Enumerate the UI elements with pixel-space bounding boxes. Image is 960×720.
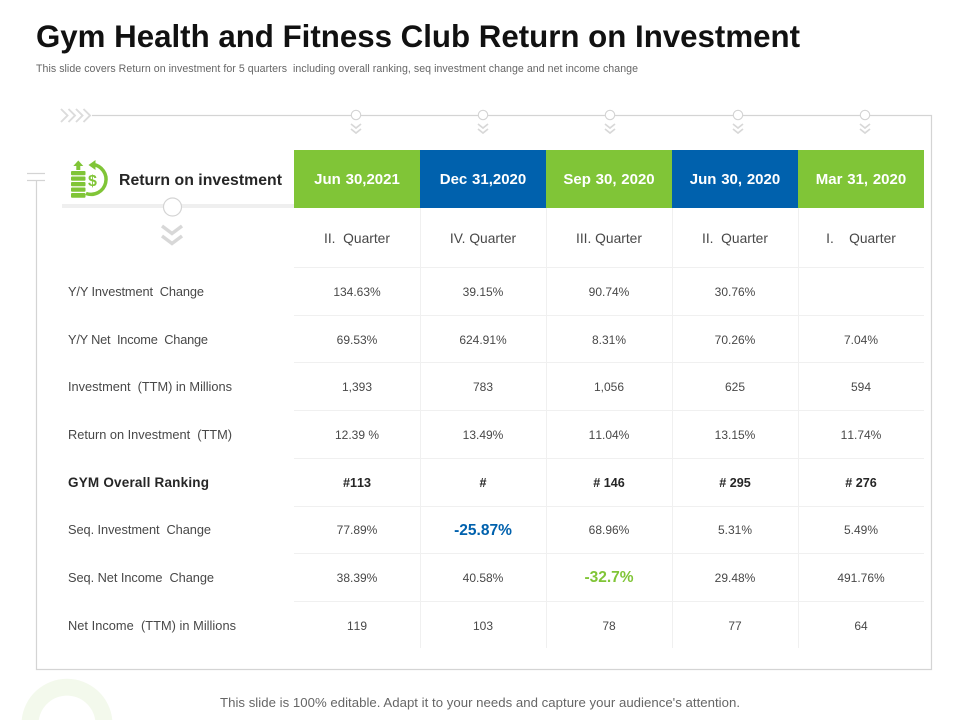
row: seq investment change: 77.89% (337, 523, 378, 537)
quarter row: IV. Quarter (450, 231, 517, 246)
row: net income ttm: 64 (854, 619, 868, 633)
row: net income ttm (68, 618, 868, 633)
row: investment ttm: 625 (725, 380, 745, 394)
row: y/y net income change (68, 332, 878, 347)
row: gym overall ranking: GYM Overall Ranking (68, 475, 209, 490)
row: seq net income change: Seq. Net Income Change (68, 570, 214, 585)
row: investment ttm (68, 379, 871, 394)
table header: Sep 30, 2020 (563, 171, 655, 188)
row: y/y net income change: 624.91% (459, 333, 507, 347)
table header (294, 150, 924, 208)
row: gym overall ranking (68, 475, 877, 490)
row: investment ttm: Investment (TTM) in Millions (68, 379, 232, 394)
row: investment ttm: 1,393 (342, 380, 372, 394)
row: gym overall ranking: # 146 (593, 476, 625, 490)
row: seq net income change: -32.7% (584, 569, 634, 586)
footer note: This slide is 100% editable. Adapt it to your needs and capture your audience's attention. (220, 695, 740, 710)
arrow: top-left chevrons (61, 109, 90, 122)
quarter row (324, 231, 896, 246)
table header: Jun 30, 2020 (690, 171, 780, 188)
row: seq investment change: -25.87% (454, 522, 512, 539)
row: y/y investment change (68, 284, 756, 299)
row: return on investment ttm: Return on Investment (TTM) (68, 427, 232, 442)
row: seq net income change: 40.58% (463, 571, 504, 585)
row: gym overall ranking: # 276 (845, 476, 877, 490)
row: return on investment ttm: 12.39 % (335, 428, 379, 442)
row: seq net income change (68, 569, 885, 586)
row: investment ttm: 594 (851, 380, 871, 394)
quarter row: I. Quarter (826, 231, 896, 246)
row: return on investment ttm: 11.04% (589, 428, 630, 442)
decorative ring (22, 679, 112, 720)
row: net income ttm: Net Income (TTM) in Millions (68, 618, 236, 633)
row: seq investment change (68, 522, 878, 539)
row: y/y net income change: 69.53% (337, 333, 378, 347)
row: net income ttm: 77 (728, 619, 742, 633)
row: y/y investment change: 90.74% (589, 285, 630, 299)
subtitle: This slide covers Return on investment for 5 quarters including overall ranking, seq investment change and net income change (36, 63, 638, 75)
row: return on investment ttm: 13.49% (463, 428, 504, 442)
row: seq net income change: 29.48% (715, 571, 756, 585)
row: y/y net income change: 70.26% (715, 333, 756, 347)
quarter row: III. Quarter (576, 231, 642, 246)
heading: return on investment: Return on investment (119, 172, 283, 189)
row: investment ttm: 783 (473, 380, 493, 394)
table header: Mar 31, 2020 (816, 171, 906, 188)
table header: Dec 31,2020 (440, 171, 526, 188)
title: Gym Health and Fitness Club Return on Investment (36, 19, 801, 54)
row: net income ttm: 103 (473, 619, 493, 633)
header divider with circle and chevrons (62, 198, 294, 244)
quarter row: II. Quarter (702, 231, 768, 246)
row: y/y investment change: Y/Y Investment Change (68, 284, 204, 299)
row: y/y net income change: 8.31% (592, 333, 626, 347)
row: seq net income change: 491.76% (837, 571, 885, 585)
row: net income ttm: 78 (602, 619, 616, 633)
icon: money stack with return arrow (71, 160, 106, 198)
table header: Jun 30,2021 (314, 171, 400, 188)
row: seq investment change: 5.31% (718, 523, 752, 537)
row: gym overall ranking: #113 (343, 476, 371, 490)
row: y/y investment change: 30.76% (715, 285, 756, 299)
quarter row: II. Quarter (324, 231, 390, 246)
row: investment ttm: 1,056 (594, 380, 624, 394)
row: seq net income change: 38.39% (337, 571, 378, 585)
row: return on investment ttm: 13.15% (715, 428, 756, 442)
row: y/y investment change: 39.15% (463, 285, 504, 299)
frame outline (27, 116, 932, 670)
row: return on investment ttm (68, 427, 882, 442)
row: seq investment change: 5.49% (844, 523, 878, 537)
row: return on investment ttm: 11.74% (841, 428, 882, 442)
row: gym overall ranking: # (479, 476, 487, 490)
row: net income ttm: 119 (347, 619, 367, 633)
row: gym overall ranking: # 295 (719, 476, 751, 490)
row: y/y net income change: 7.04% (844, 333, 878, 347)
row: seq investment change: Seq. Investment Change (68, 522, 211, 537)
row: y/y investment change: 134.63% (333, 285, 381, 299)
row: seq investment change: 68.96% (589, 523, 630, 537)
row: y/y net income change: Y/Y Net Income Change (68, 332, 208, 347)
column markers (351, 110, 870, 133)
icon: money stack with return arrow: $ (88, 173, 97, 190)
